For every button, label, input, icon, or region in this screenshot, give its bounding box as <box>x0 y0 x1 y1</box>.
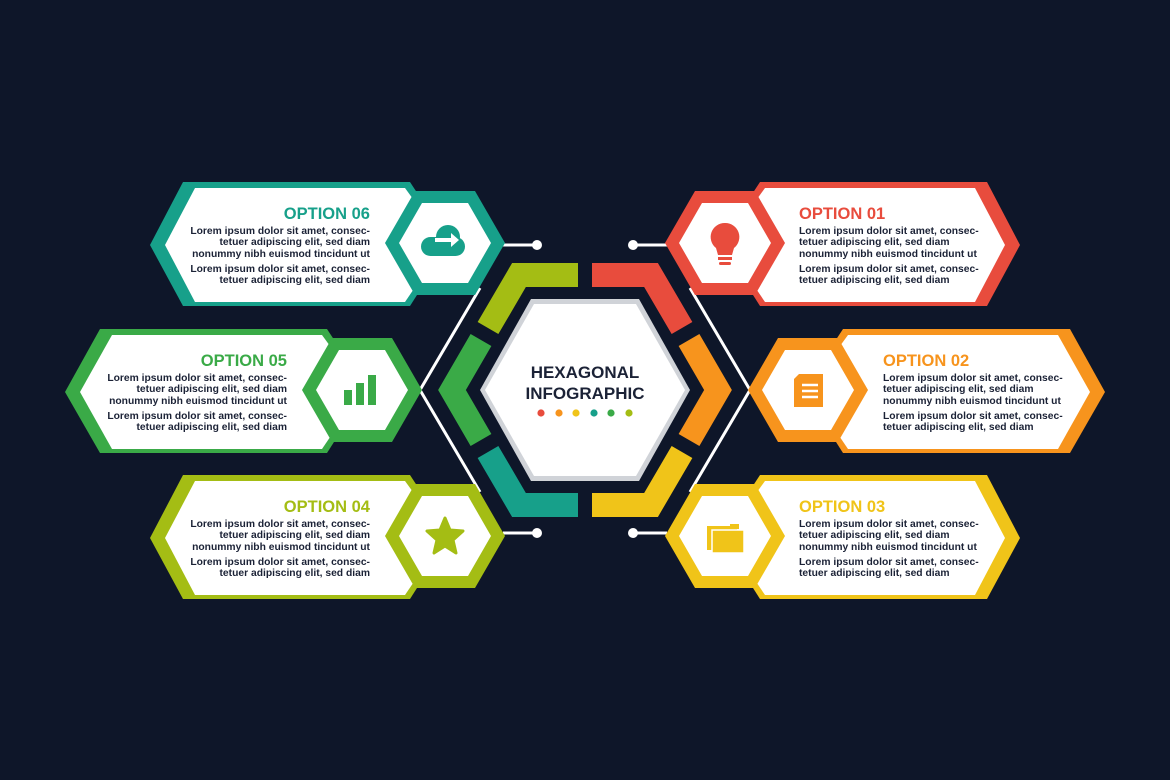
center hexagon title: HEXAGONAL <box>531 363 639 382</box>
card: option 06: tetuer adipiscing elit, sed diam <box>220 275 370 286</box>
card: option 02: nonummy nibh euismod tincidunt ut <box>883 396 1061 407</box>
card: option 05: tetuer adipiscing elit, sed diam <box>136 384 287 395</box>
card: option 04: Lorem ipsum dolor sit amet, consec- <box>190 519 371 530</box>
card: option 04: OPTION 04 <box>284 498 371 516</box>
card: option 04 <box>150 475 505 599</box>
card: option 01 <box>665 182 1020 306</box>
center hexagon title <box>480 299 690 481</box>
center ring segments <box>452 275 718 505</box>
card: option 05: tetuer adipiscing elit, sed diam <box>136 422 287 433</box>
card: option 03: Lorem ipsum dolor sit amet, consec- <box>799 557 979 568</box>
card: option 04: Lorem ipsum dolor sit amet, consec- <box>190 557 371 568</box>
card: option 03 <box>665 475 1020 599</box>
card: option 03: OPTION 03 <box>799 498 885 516</box>
card: option 02: tetuer adipiscing elit, sed diam <box>883 384 1034 395</box>
card: option 04: nonummy nibh euismod tincidunt ut <box>192 542 371 553</box>
card: option 06: Lorem ipsum dolor sit amet, consec- <box>190 264 371 275</box>
connector lines <box>420 240 750 538</box>
card: option 06 <box>150 182 505 306</box>
card: option 03: Lorem ipsum dolor sit amet, consec- <box>799 519 979 530</box>
center hexagon title: INFOGRAPHIC <box>526 384 644 403</box>
card: option 06: Lorem ipsum dolor sit amet, consec- <box>190 226 371 237</box>
card: option 05: Lorem ipsum dolor sit amet, consec- <box>107 373 288 384</box>
card: option 05 <box>65 329 422 453</box>
card: option 01: OPTION 01 <box>799 205 885 223</box>
card: option 02: tetuer adipiscing elit, sed diam <box>883 422 1034 433</box>
card: option 04: tetuer adipiscing elit, sed diam <box>220 530 370 541</box>
card: option 06: nonummy nibh euismod tincidunt ut <box>192 249 371 260</box>
card: option 02 <box>748 329 1105 453</box>
card: option 06: OPTION 06 <box>284 205 370 223</box>
card: option 02: OPTION 02 <box>883 352 969 370</box>
card: option 02: Lorem ipsum dolor sit amet, consec- <box>883 373 1063 384</box>
card: option 01: Lorem ipsum dolor sit amet, consec- <box>799 226 979 237</box>
card: option 02: Lorem ipsum dolor sit amet, consec- <box>883 411 1063 422</box>
card: option 05: nonummy nibh euismod tincidunt ut <box>109 396 288 407</box>
card: option 01: tetuer adipiscing elit, sed diam <box>799 275 950 286</box>
card: option 01: nonummy nibh euismod tincidunt ut <box>799 249 977 260</box>
card: option 05: Lorem ipsum dolor sit amet, consec- <box>107 411 288 422</box>
card: option 06: tetuer adipiscing elit, sed diam <box>220 237 370 248</box>
card: option 01: tetuer adipiscing elit, sed diam <box>799 237 950 248</box>
card: option 03: nonummy nibh euismod tincidunt ut <box>799 542 977 553</box>
card: option 03: tetuer adipiscing elit, sed diam <box>799 568 950 579</box>
card: option 01: Lorem ipsum dolor sit amet, consec- <box>799 264 979 275</box>
card: option 05: OPTION 05 <box>201 352 287 370</box>
card: option 03: tetuer adipiscing elit, sed diam <box>799 530 950 541</box>
card: option 04: tetuer adipiscing elit, sed diam <box>220 568 370 579</box>
